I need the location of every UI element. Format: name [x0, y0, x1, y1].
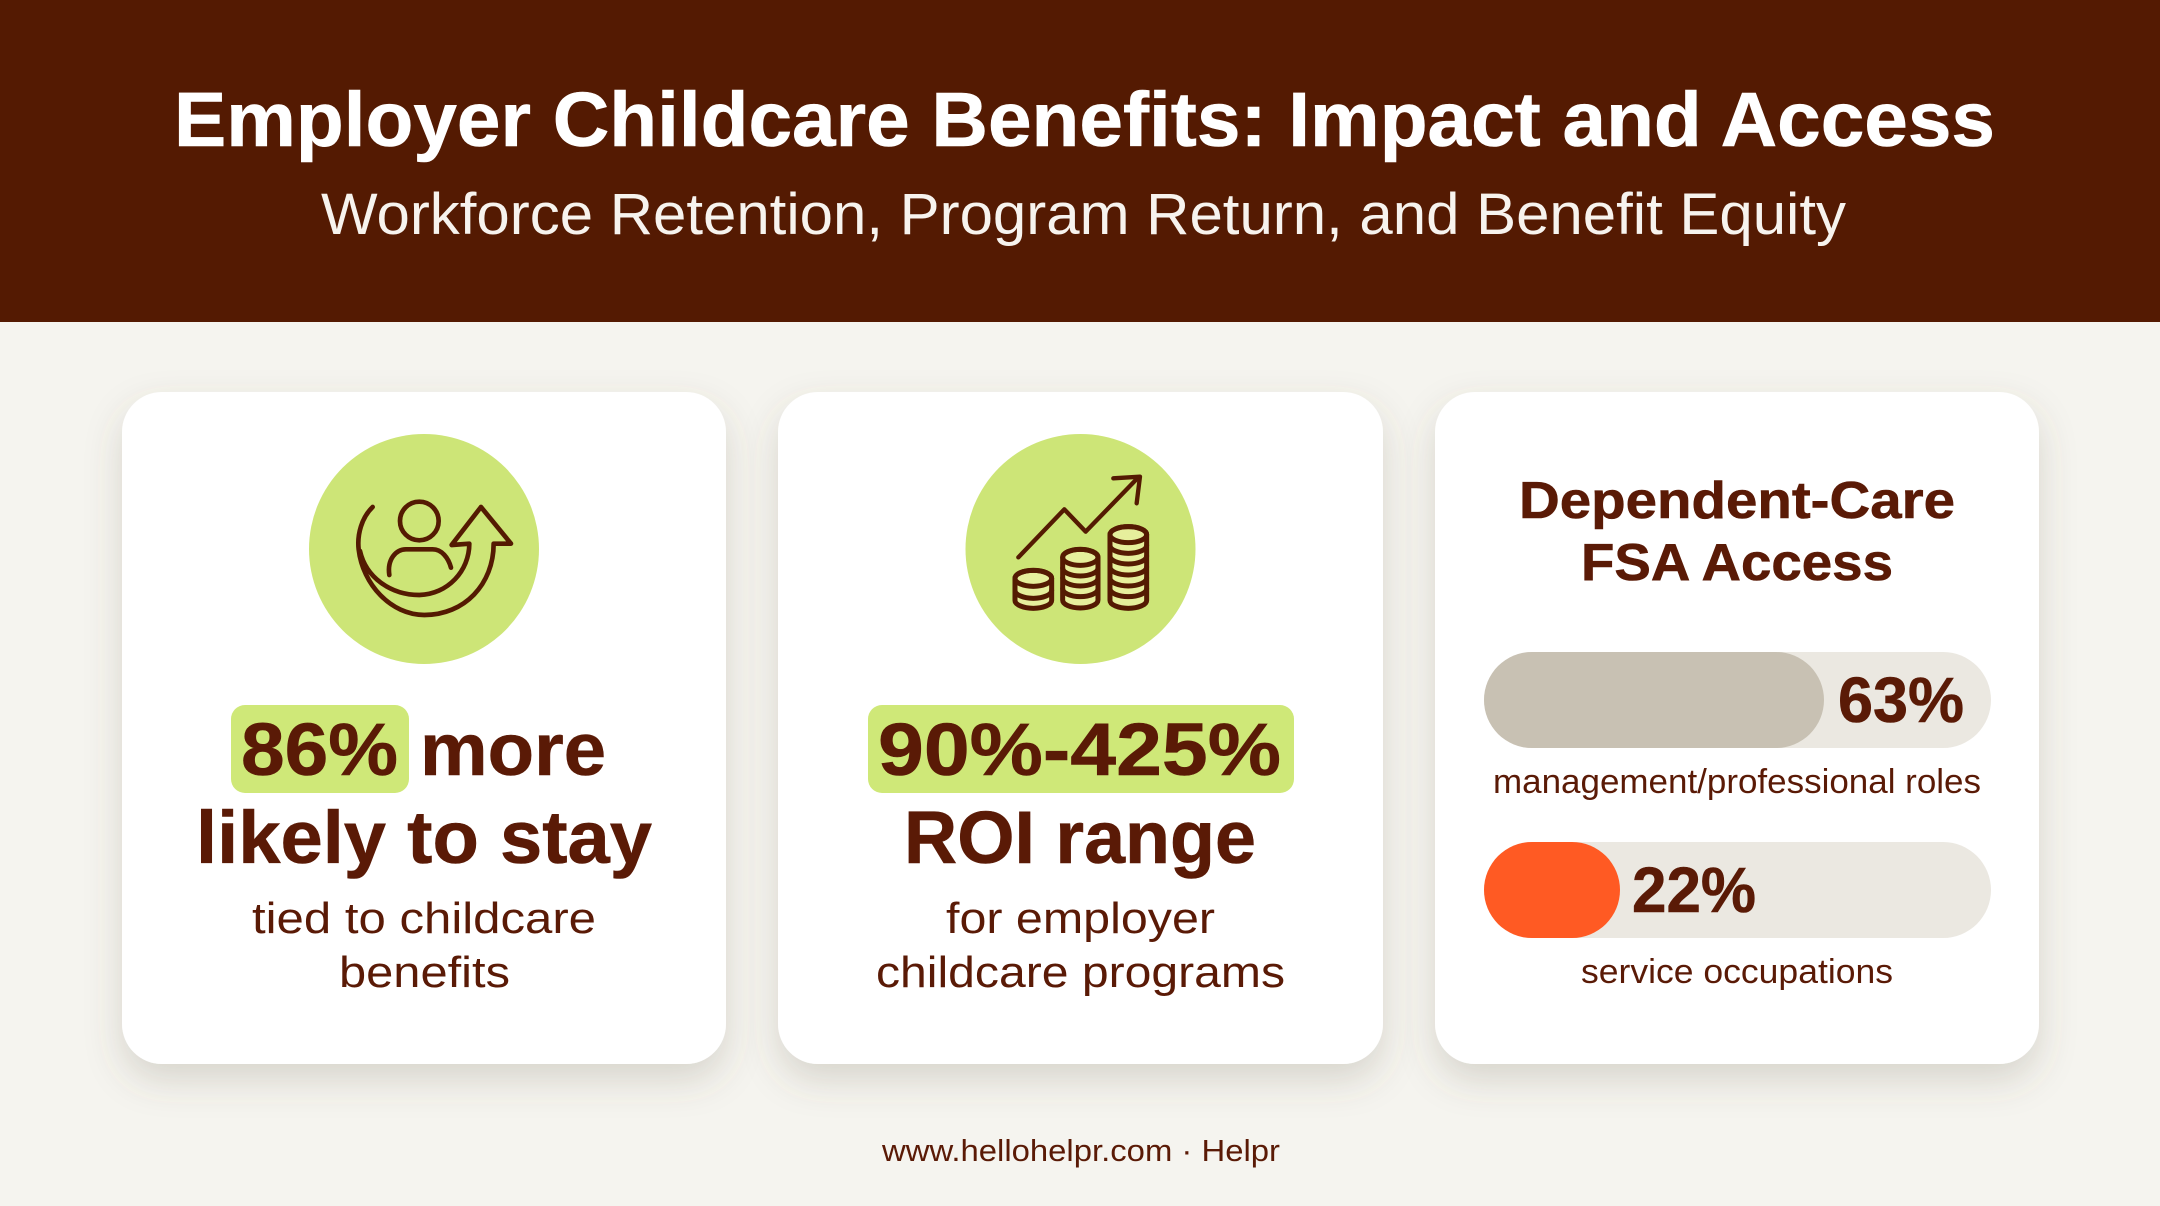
description: tied to childcare [252, 894, 596, 943]
bar label: management/professional roles [1493, 763, 1981, 801]
stat highlight: 90%-425%: 90%-425% [878, 708, 1281, 791]
bar: management/professional 63%: 63% [1838, 664, 1964, 736]
bar label: service occupations [1581, 953, 1893, 991]
panel heading: Dependent-Care [1519, 472, 1955, 530]
bar: service occupations 22%: 22% [1632, 854, 1756, 926]
description: for employer [946, 894, 1215, 943]
panel heading: FSA Access [1581, 534, 1893, 592]
panel heading [1519, 472, 1955, 592]
description [252, 894, 596, 997]
bar: management/professional 63% [1484, 652, 1991, 748]
stat text: ROI range: ROI range [904, 796, 1256, 879]
description: benefits [339, 948, 510, 997]
subtitle: Workforce Retention, Program Return, and Benefit Equity [321, 182, 1846, 247]
description: childcare programs [876, 948, 1285, 997]
stat highlight: 86%: 86% [241, 708, 398, 791]
icon: rising chart with coin stacks [966, 434, 1196, 664]
title: Employer Childcare Benefits: Impact and Access [174, 77, 1995, 163]
icon: person with circular arrow [309, 434, 539, 664]
bar: service occupations 22% [1484, 842, 1991, 938]
panel: retention [122, 392, 726, 1064]
header banner [0, 0, 2160, 322]
stat text: more likely to stay: likely to stay [196, 796, 652, 879]
stat text: more likely to stay [196, 708, 652, 879]
stat text: more likely to stay: more [420, 708, 606, 791]
panel: dependent-care FSA access [1435, 392, 2039, 1064]
panel: ROI [778, 392, 1383, 1064]
description [876, 894, 1285, 997]
footer: www.hellohelpr.com · Helpr [881, 1133, 1280, 1168]
